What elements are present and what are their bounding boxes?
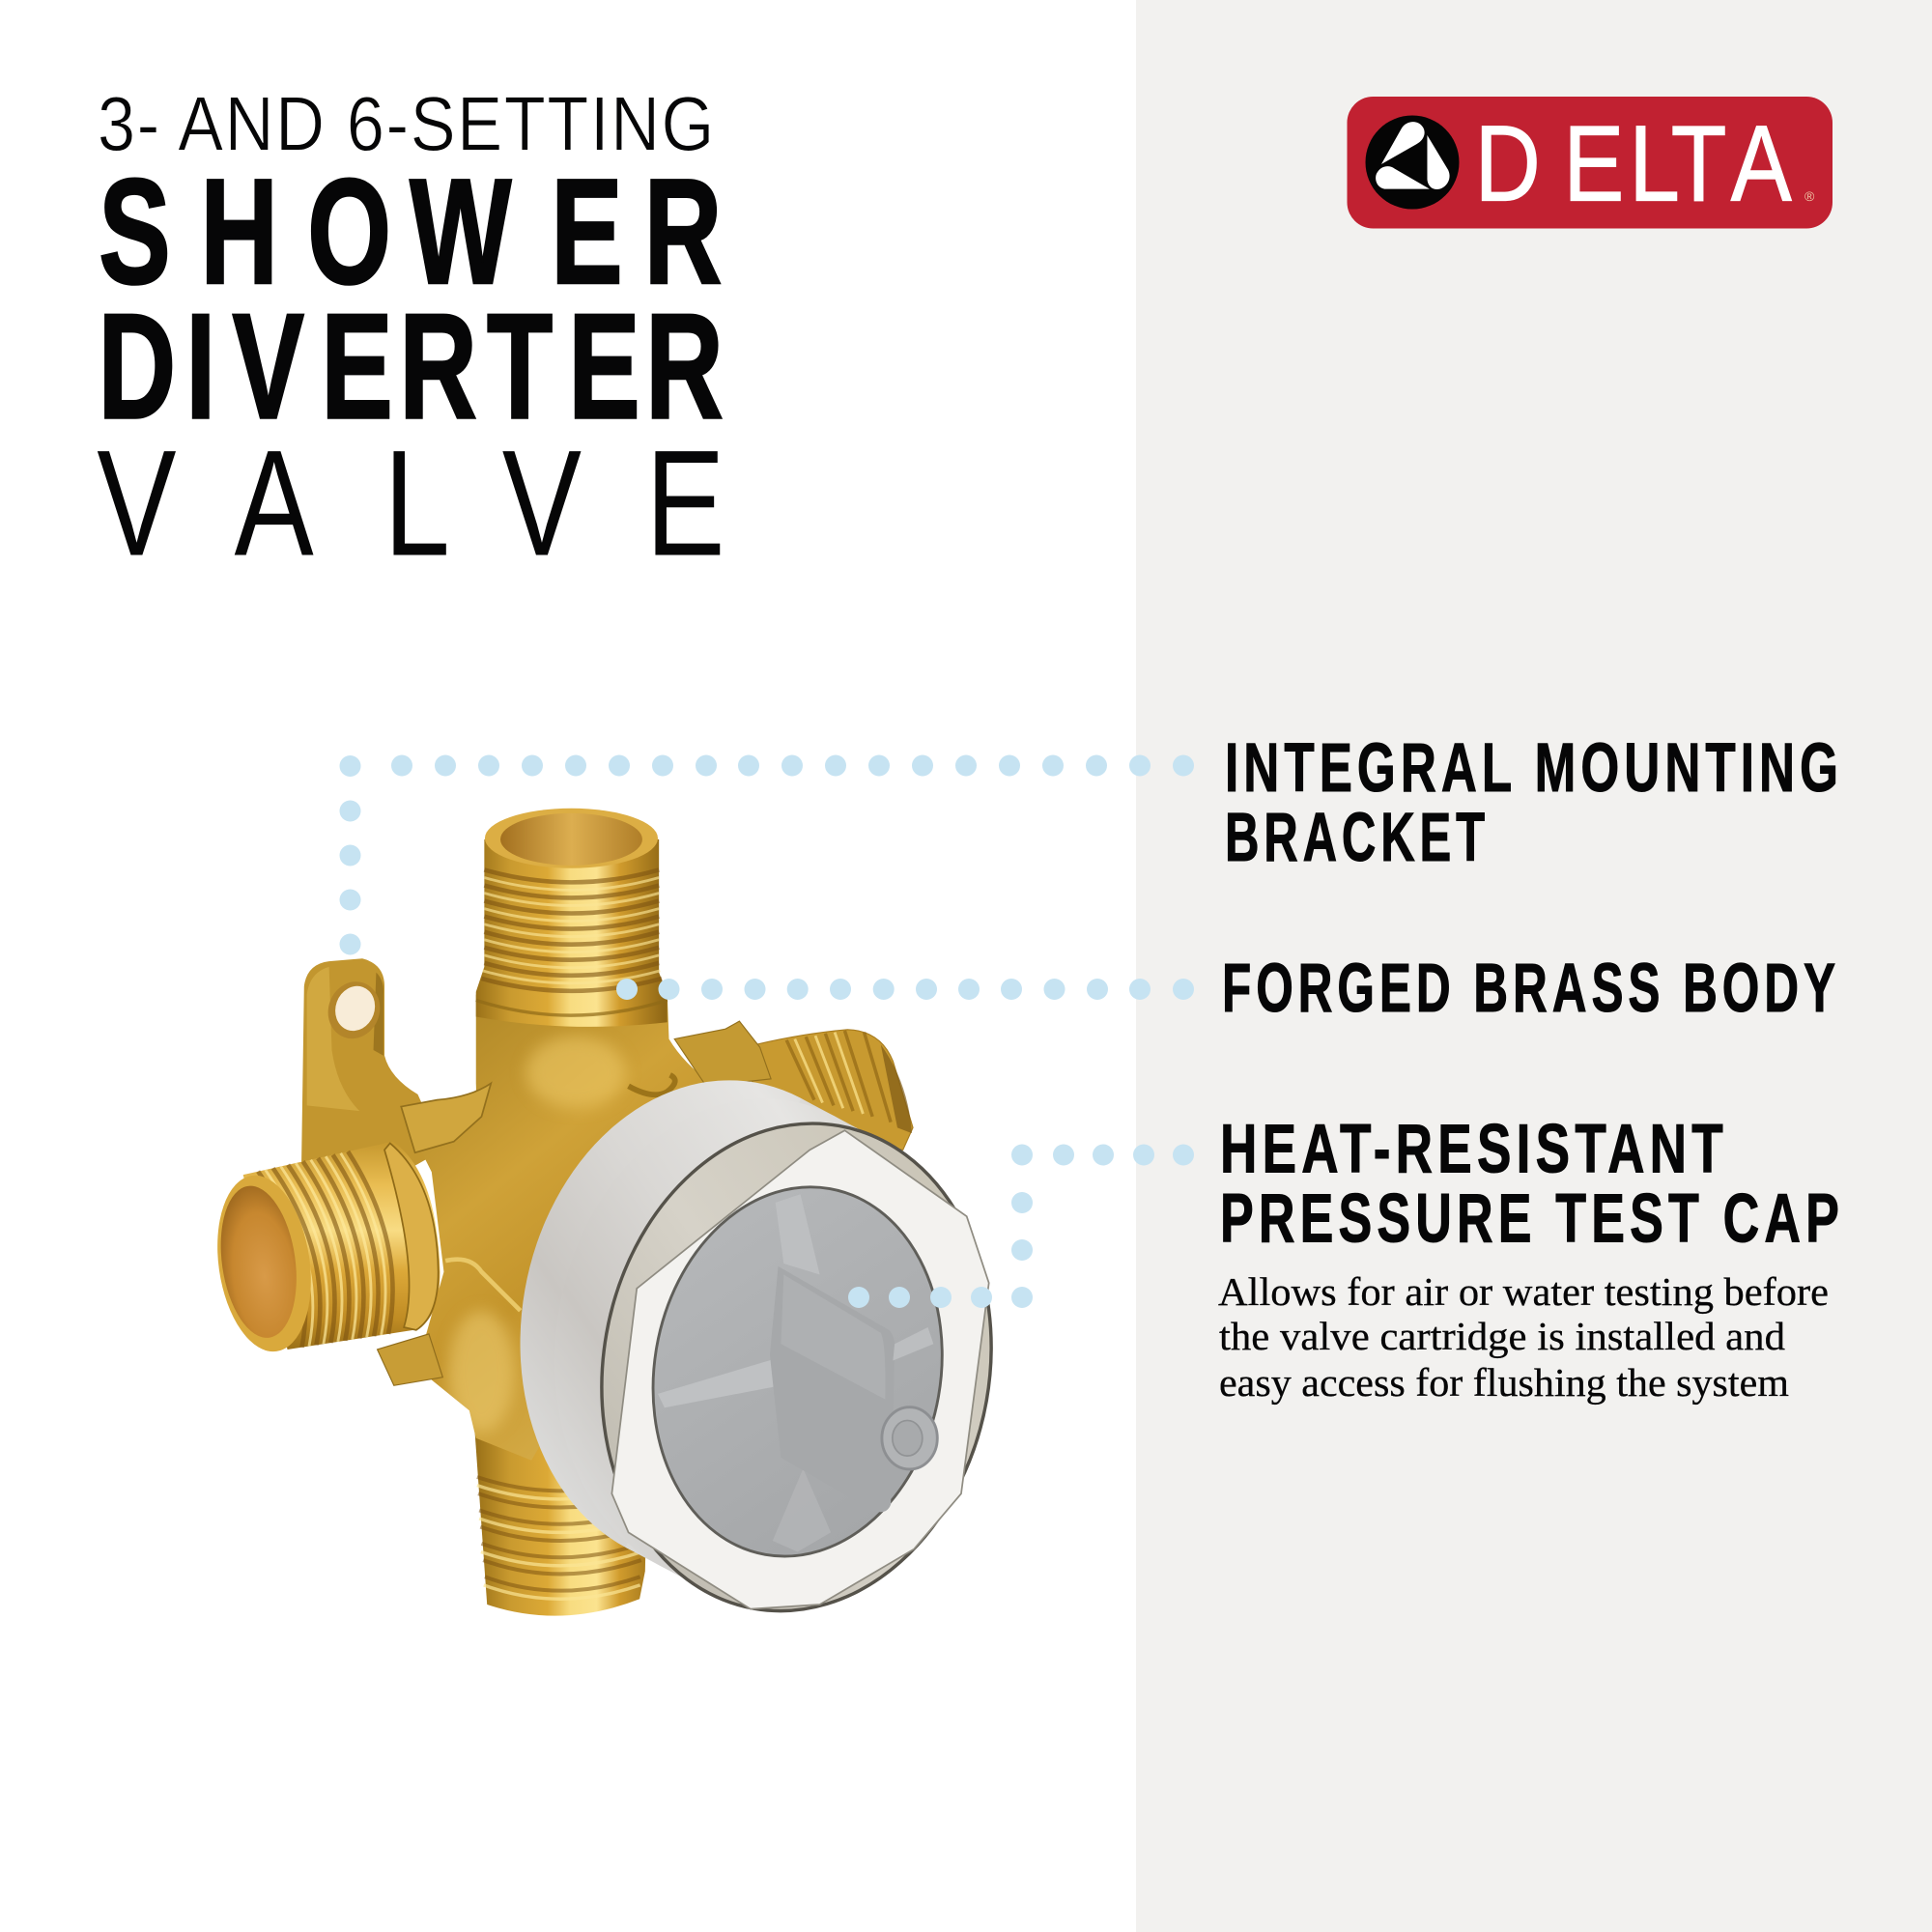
- logo: registered mark: ®: [1804, 188, 1815, 204]
- feature label: integral mounting bracket: BRACKET: [1225, 800, 1490, 876]
- upper left fin: [401, 1083, 491, 1152]
- logo: wordmark: DELTA: [1475, 103, 1792, 223]
- feature description text: Allows for air or water testing before: [1218, 1269, 1829, 1314]
- logo: red badge: [1347, 97, 1833, 228]
- panel: light grey right column: [1136, 0, 1932, 1932]
- cap: hex nut: [611, 1130, 989, 1609]
- dotted leader: forged brass body: [616, 979, 1194, 1000]
- feature label: integral mounting bracket: [1225, 730, 1843, 876]
- title line: diverter: DIVERTER: [99, 282, 724, 450]
- title line: valve: VALVE: [97, 419, 725, 587]
- heat-resistant pressure test cap: [483, 1049, 1029, 1642]
- cap: outer ring: [564, 1093, 1029, 1642]
- left threaded port: [207, 1142, 440, 1357]
- Delta logo: [1347, 97, 1833, 228]
- forged brass body: [425, 995, 703, 1461]
- cap: grey plastic disc: [624, 1164, 971, 1579]
- cap: test nipple: [882, 1407, 937, 1469]
- mounting bracket with hole: [301, 958, 442, 1172]
- panel: white background: [0, 0, 1136, 1932]
- logo: black circle emblem: [1366, 116, 1459, 209]
- dotted leader: pressure test cap: [848, 1144, 1194, 1308]
- back right threaded port: [748, 1030, 913, 1150]
- lower left fin: [378, 1334, 442, 1385]
- feature description text: [1218, 1269, 1829, 1405]
- cap: moulded ribs: [658, 1194, 933, 1551]
- valve product illustration: [207, 809, 1029, 1642]
- upper right fin: [674, 1021, 771, 1086]
- dotted leader: integral mounting bracket: [340, 755, 1194, 954]
- feature description text: the valve cartridge is installed and: [1219, 1314, 1785, 1358]
- feature description text: easy access for flushing the system: [1219, 1360, 1789, 1405]
- top threaded nipple: [476, 809, 668, 1027]
- cap: silver outer band: [483, 1049, 979, 1614]
- title: [97, 81, 725, 587]
- bottom threaded nipple: [475, 1433, 648, 1616]
- feature label: heat-resistant pressure test cap: [1220, 1111, 1844, 1258]
- logo: white petals: [1376, 122, 1450, 189]
- title line: shower: SHOWER: [99, 148, 722, 315]
- feature label: heat-resistant pressure test cap: HEAT-RESISTANT: [1220, 1111, 1728, 1188]
- title line: 3- and 6-setting: 3- AND 6-SETTING: [98, 81, 716, 166]
